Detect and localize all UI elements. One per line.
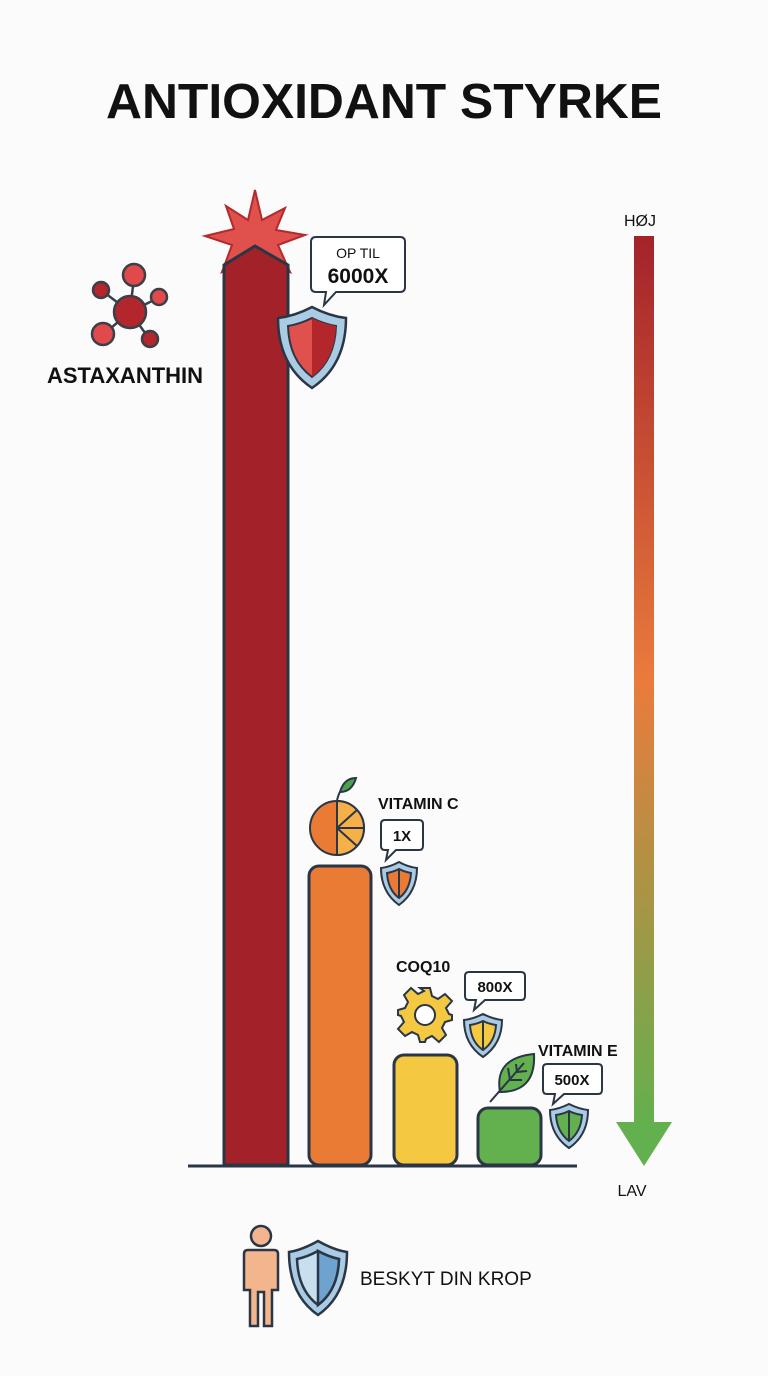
baseline	[188, 1164, 577, 1168]
label: astaxanthin: ASTAXANTHIN	[47, 363, 203, 388]
callout: 800X	[465, 972, 525, 1010]
callout: 500X	[543, 1064, 602, 1104]
title: ANTIOXIDANT STYRKE	[106, 75, 662, 129]
icon: orange	[310, 778, 364, 855]
gradient arrow	[616, 236, 672, 1166]
label: lav: LAV	[617, 1183, 647, 1200]
label: vitamin e: VITAMIN E	[538, 1043, 618, 1060]
label: høj: HØJ	[624, 213, 656, 230]
icon: shield orange	[381, 862, 417, 905]
bar: astaxanthin	[205, 190, 305, 1165]
callout: 500X: 500X	[554, 1072, 590, 1089]
icon: leaf	[490, 1054, 534, 1102]
callout: 6000X	[311, 237, 405, 305]
icon: gear	[398, 988, 452, 1042]
footer: beskyt din krop	[244, 1226, 532, 1326]
text: beskyt din krop: BESKYT DIN KROP	[360, 1269, 532, 1290]
bar: vitamin e	[478, 1108, 541, 1165]
icon: shield yellow	[464, 1014, 502, 1057]
callout: 1X	[381, 820, 423, 860]
label: coq10: COQ10	[396, 959, 450, 976]
icon: molecule	[92, 264, 167, 347]
callout: 1X: 1X	[393, 828, 411, 845]
icon: starburst	[205, 190, 305, 275]
label: vitamin c: VITAMIN C	[378, 796, 459, 813]
callout: 800X: 800X	[477, 979, 513, 996]
icon: shield green	[550, 1104, 588, 1148]
icon: shield blue	[289, 1241, 347, 1315]
icon: person	[244, 1226, 278, 1326]
bar: coq10	[394, 1055, 457, 1165]
callout: 6000X: 6000X	[328, 265, 388, 288]
bar: vitamin c	[309, 866, 371, 1165]
icon: big shield	[278, 307, 346, 388]
callout: 6000X: OP TIL	[336, 245, 380, 261]
